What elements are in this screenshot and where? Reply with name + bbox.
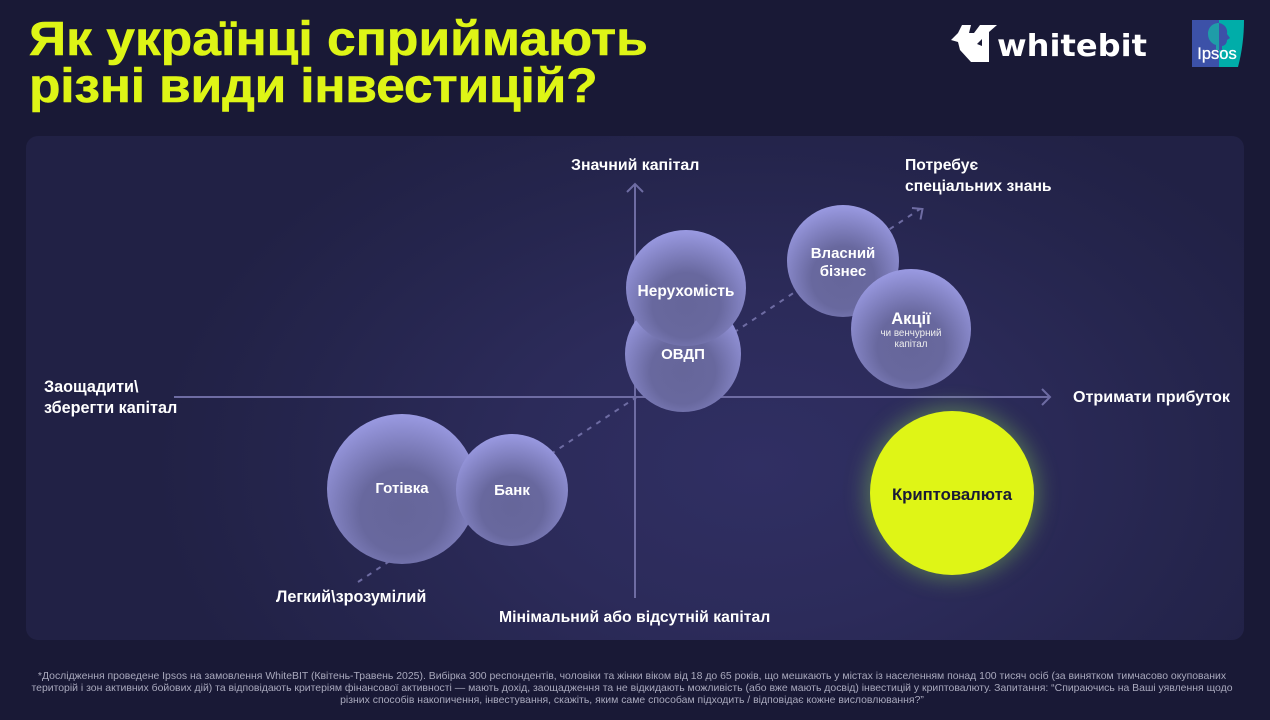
title: Як українці сприймають bbox=[29, 13, 648, 66]
footnote bbox=[31, 671, 1233, 706]
axis label: diagonal top: спеціальних знань bbox=[905, 178, 1052, 195]
axis label: bottom: Мінімальний або відсутній капітал bbox=[499, 609, 770, 626]
logo: whitebit bbox=[951, 25, 1147, 64]
bubble: Акції: Акції bbox=[891, 310, 931, 328]
axis label: left: зберегти капітал bbox=[44, 399, 177, 417]
axis label: diagonal top bbox=[905, 157, 1052, 195]
bubble: ОВДП bbox=[625, 296, 741, 412]
footnote: *Дослідження проведене Ipsos на замовлення WhiteBIT (Квітень-Травень 2025). Вибірка 300 респондентів, чоловіки та жінки віком від 18 до 65 років, що мешкають у містах із населенням понад 100 тисяч осіб (за винятком тимчасово окупованих bbox=[38, 671, 1226, 682]
bubble: Криптовалюта: Криптовалюта bbox=[892, 485, 1012, 504]
axis label: left: Заощадити\ bbox=[44, 378, 138, 396]
axis label: diagonal bottom: Легкий\зрозумілий bbox=[276, 588, 426, 606]
title: різні види інвестицій? bbox=[29, 60, 597, 113]
bubble: Нерухомість bbox=[626, 230, 746, 346]
bubble: Акції: чи венчурний bbox=[881, 328, 941, 338]
bubble: Власний бізнес: бізнес bbox=[820, 262, 866, 280]
bubble: Готівка: Готівка bbox=[375, 480, 429, 497]
bubble: Банк bbox=[456, 434, 568, 546]
footnote: територій і зон активних бойових дій) та відповідають критеріям фінансової активності — мають дохід, заощадження та не відкидають можливість (або вже мають досвід) інвестицій у криптовалюту. Запитання: “Спираючись на Ваші уявлення щодо bbox=[31, 683, 1233, 694]
logo: Ipsos bbox=[1192, 20, 1244, 67]
bubble: Банк: Банк bbox=[494, 482, 530, 499]
axis label: left bbox=[44, 378, 177, 417]
axis label: right: Отримати прибуток bbox=[1073, 388, 1230, 406]
bubble: Акції bbox=[851, 269, 971, 389]
panel: perception map bbox=[26, 136, 1244, 640]
axis label: top: Значний капітал bbox=[571, 157, 699, 174]
logo: Ipsos: Ipsos bbox=[1197, 45, 1237, 63]
bubble: Акції: капітал bbox=[894, 339, 927, 350]
bubble: Власний бізнес bbox=[787, 205, 899, 317]
label: ОВДП: ОВДП bbox=[661, 346, 705, 363]
title bbox=[29, 13, 648, 113]
axis label: diagonal top: Потребує bbox=[905, 157, 978, 174]
bubble: Нерухомість: Нерухомість bbox=[638, 282, 734, 300]
bubble: Готівка bbox=[327, 414, 477, 564]
bubble: Криптовалюта bbox=[870, 411, 1034, 575]
footnote: різних способів накопичення, інвестування, скажіть, яким саме способам підходить / відповідає кожне висловлювання?” bbox=[340, 695, 924, 706]
logo: whitebit: whitebit bbox=[997, 29, 1147, 64]
bubble: Власний бізнес: Власний bbox=[811, 244, 875, 262]
